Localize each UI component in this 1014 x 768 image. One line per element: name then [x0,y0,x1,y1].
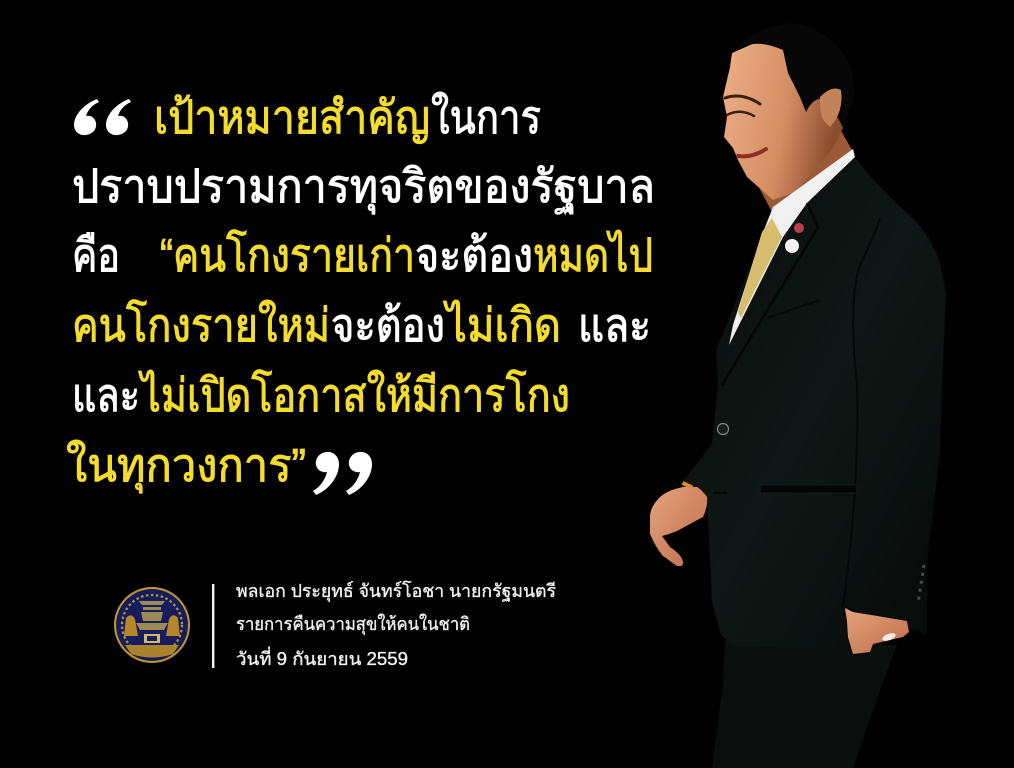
right hand [845,608,909,654]
shirt collar [729,149,855,345]
jacket button [718,424,728,434]
line 3: “คนโกงรายเก่า [160,229,415,281]
line 4: คนโกงรายใหม่ [72,299,330,351]
line 1: เป้าหมายสำคัญ [154,91,430,143]
line 4: และ [578,299,651,351]
trousers [712,640,897,768]
government seal logo [114,587,190,663]
vertical divider [212,584,214,668]
brow, eye and smile [725,96,766,156]
closing quotation mark [313,452,372,495]
line 3: หมดไป [533,229,653,281]
red lapel pin [794,223,804,233]
line 5: และ [72,369,140,421]
quote block [66,91,655,495]
jacket [683,155,946,649]
sleeve buttons [918,565,924,604]
caption line: date: วันที่ 9 กันยายน 2559 [236,646,408,669]
opening quotation mark [74,99,131,135]
neck [755,120,852,222]
lapel edge [722,203,818,385]
left hand [650,487,707,566]
line 3: จะต้อง [415,229,533,281]
tie [738,218,782,318]
line 2: ปราบปรามการทุจริตของรัฐบาล [72,160,655,215]
line 5: ไม่เปิดโอกาสให้มีการโกง [138,369,570,421]
face [723,42,843,200]
line 4: ไม่เกิด [442,299,561,351]
white lapel pin [785,239,799,253]
line 3: คือ [72,229,120,281]
hip pocket [760,485,857,493]
breast pocket [767,300,820,318]
line 4: จะต้อง [331,299,445,351]
source caption [236,580,556,669]
left wrist band [682,481,693,489]
jacket front slit [713,492,727,494]
ear [820,89,842,127]
sleeve seam [843,218,880,607]
line 3 [72,229,653,281]
line 6: ในทุกวงการ” [66,439,306,494]
hair [732,23,854,127]
line 1: ในการ [431,91,541,143]
portrait of speaker [650,23,946,768]
ring [881,632,897,642]
caption line: programme: รายการคืนความสุขให้คนในชาติ [236,613,470,635]
caption line: speaker: พลเอก ประยุทธ์ จันทร์โอชา นายกรัฐมนตรี [236,580,556,602]
line 4 [72,299,651,351]
